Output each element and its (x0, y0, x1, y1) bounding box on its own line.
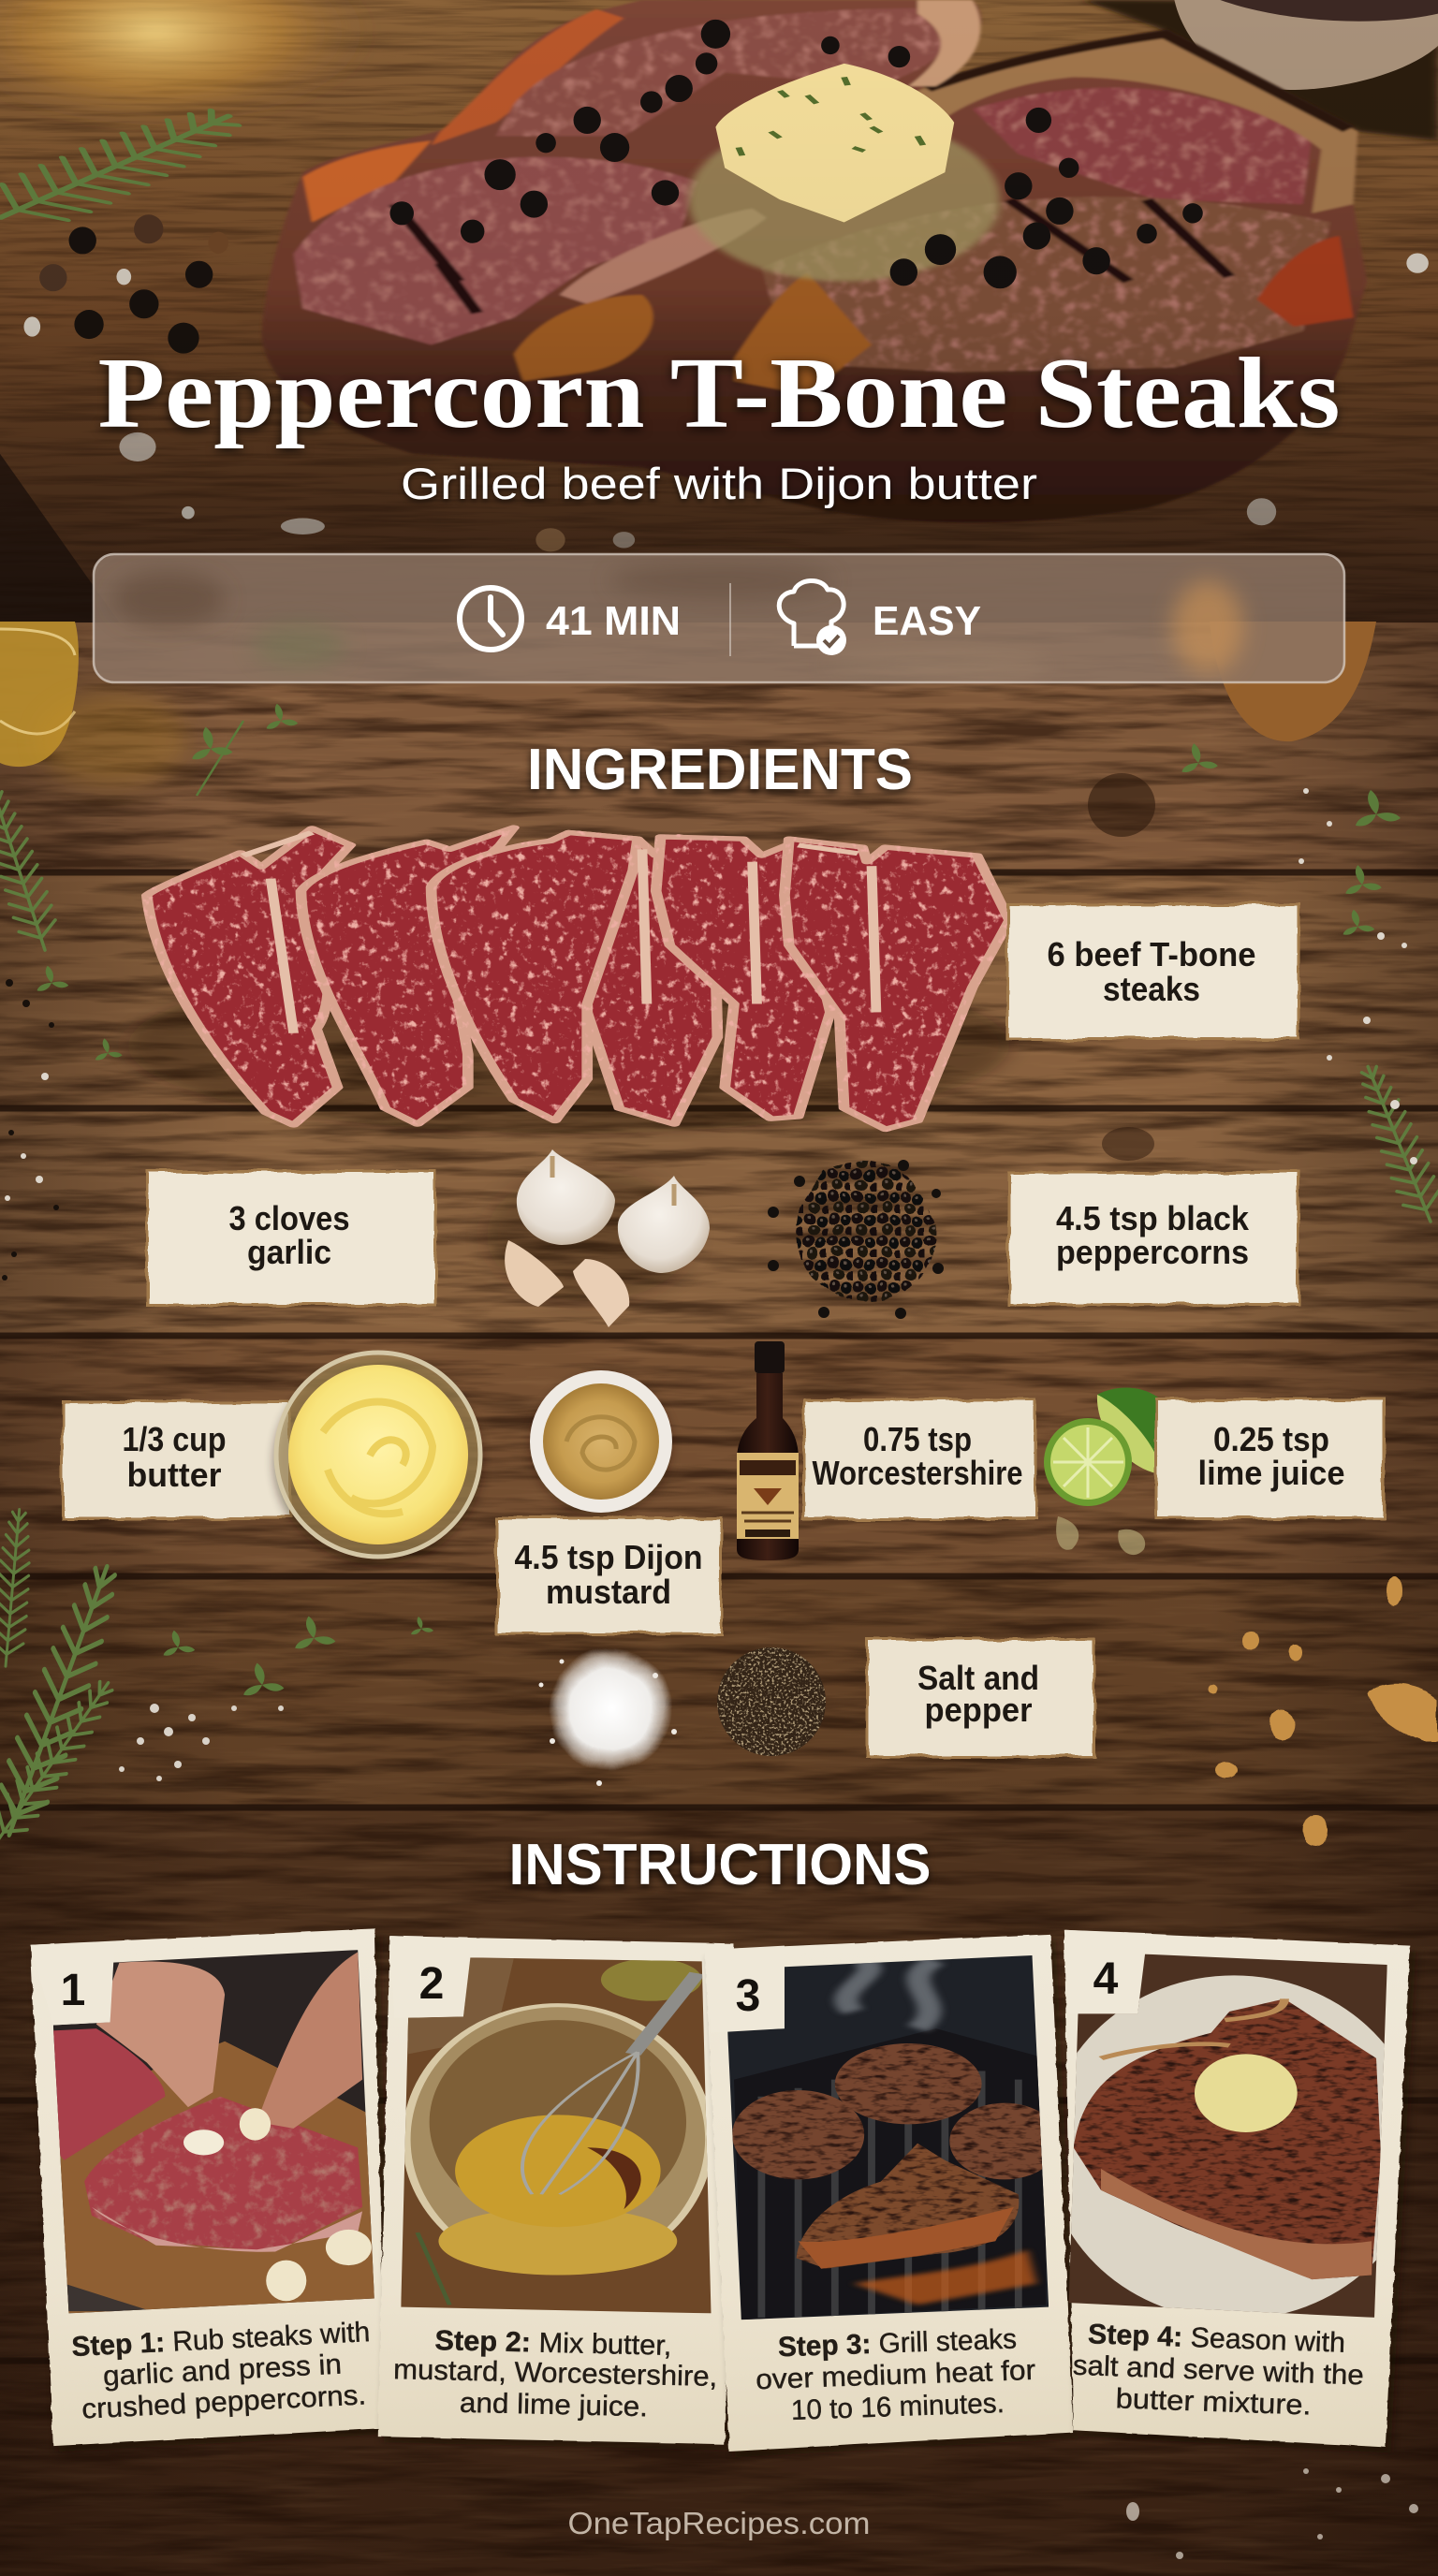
footer: OneTapRecipes.com (567, 2506, 871, 2540)
step 3 text (754, 2323, 1037, 2427)
label: 0.75 tsp Worcestershire: Worcestershire (813, 1454, 1022, 1492)
ingredients heading: INGREDIENTS (527, 738, 913, 802)
label: 4.5 tsp black peppercorns: 4.5 tsp black (1056, 1199, 1250, 1237)
lime slices (1044, 1388, 1179, 1555)
step 1 text: garlic and press in (102, 2349, 343, 2392)
label: 4.5 tsp black peppercorns: peppercorns (1056, 1233, 1249, 1271)
glass glow (0, 0, 367, 127)
time label: 41 MIN (546, 598, 681, 644)
cutting board (0, 0, 1438, 622)
label: 4.5 tsp black peppercorns (1009, 1172, 1299, 1305)
black peppercorn pile (768, 1160, 944, 1319)
difficulty label: EASY (873, 598, 981, 644)
corner shadow (1082, 0, 1438, 140)
step 4 text (1071, 2319, 1365, 2423)
card: step 4: 4 (1093, 1954, 1119, 2004)
step 3 text: 10 to 16 minutes. (790, 2388, 1005, 2426)
raw T-bone steaks (128, 827, 1009, 1134)
label: salt and pepper: pepper (925, 1690, 1032, 1729)
label: 3 cloves garlic: garlic (247, 1233, 331, 1271)
step 2 text: mustard, Worcestershire, (393, 2354, 718, 2393)
hero steak photo (0, 0, 1438, 622)
step 3 text: over medium heat for (756, 2355, 1036, 2395)
rosemary (0, 97, 263, 236)
label: salt and pepper (867, 1639, 1094, 1757)
step 2 text: Step 2: Mix butter, (434, 2325, 672, 2362)
card: step 1 (30, 1928, 390, 2452)
step 2 text (392, 2324, 718, 2424)
card: step 4 (1046, 1930, 1422, 2453)
garlic bulbs and cloves (487, 1149, 710, 1327)
number badge: 3 (705, 1946, 785, 2033)
step 3 text: Step 3: Grill steaks (777, 2324, 1017, 2363)
card: step 3: 3 (736, 1971, 760, 2021)
Worcestershire bottle (737, 1341, 799, 1560)
wooden pepper mill (1210, 622, 1376, 741)
butter bowl (273, 1353, 483, 1565)
salt pile (539, 1647, 677, 1786)
title: Peppercorn T-Bone Steaks (97, 338, 1341, 449)
mustard bowl (530, 1370, 672, 1516)
label: 6 beef T-bone steaks: steaks (1103, 970, 1200, 1008)
label: 6 beef T-bone steaks: 6 beef T-bone (1047, 935, 1256, 973)
label: 1/3 cup butter: 1/3 cup (122, 1420, 227, 1458)
step 1 text (71, 2317, 374, 2425)
step 4 text: salt and serve with the (1072, 2350, 1364, 2392)
step 4 text: Step 4: Season with (1088, 2319, 1346, 2359)
label: 0.25 tsp lime juice (1156, 1399, 1384, 1518)
card: step 2: 2 (419, 1959, 444, 2009)
label: 3 cloves garlic (147, 1171, 436, 1305)
step 2 text: and lime juice. (460, 2388, 648, 2422)
card: step 1: 1 (61, 1966, 85, 2015)
icon: clock (460, 588, 521, 650)
label: 0.75 tsp Worcestershire (803, 1399, 1035, 1519)
label: 6 beef T-bone steaks (1007, 904, 1299, 1039)
label: salt and pepper: Salt and (917, 1659, 1039, 1697)
label: 0.25 tsp lime juice: 0.25 tsp (1213, 1420, 1329, 1458)
label: 4.5 tsp Dijon mustard: 4.5 tsp Dijon (515, 1538, 702, 1576)
label: 1/3 cup butter (63, 1402, 289, 1518)
steak (261, 0, 1367, 522)
label: 3 cloves garlic: 3 cloves (228, 1199, 350, 1237)
ground pepper pile (717, 1647, 826, 1756)
herbs and salt at ingredients sides (0, 704, 1438, 1281)
herb butter (688, 64, 1000, 282)
info pill (94, 554, 1344, 682)
crumbs, right (1208, 1576, 1438, 1845)
rosemary and scattered seasoning, left (0, 1508, 433, 1854)
step 4 text: butter mixture. (1115, 2383, 1312, 2422)
number badge: 1 (30, 1941, 115, 2026)
step 1 text: crushed peppercorns. (81, 2379, 367, 2425)
label: 4.5 tsp Dijon mustard: mustard (546, 1573, 671, 1611)
icon: chef hat (779, 580, 846, 655)
card: step 3 (705, 1934, 1078, 2457)
number badge: 2 (389, 1936, 473, 2018)
step cards (30, 1928, 1422, 2457)
card: step 2 (378, 1936, 740, 2451)
bowl of peppercorns (1174, 0, 1438, 90)
label: 0.75 tsp Worcestershire: 0.75 tsp (863, 1420, 972, 1458)
label: 1/3 cup butter: butter (127, 1456, 221, 1494)
peppercorns on board (39, 214, 228, 354)
peppercorns on steak (389, 20, 1203, 288)
instructions heading: INSTRUCTIONS (509, 1833, 931, 1897)
olive oil glass (0, 622, 187, 786)
label: 4.5 tsp Dijon mustard (497, 1518, 721, 1633)
salt scatter, bottom right (1126, 2468, 1418, 2559)
number badge: 4 (1064, 1930, 1145, 2013)
subtitle: Grilled beef with Dijon butter (401, 459, 1037, 508)
step 1 text: Step 1: Rub steaks with (71, 2317, 371, 2363)
label: 0.25 tsp lime juice: lime juice (1198, 1454, 1344, 1492)
